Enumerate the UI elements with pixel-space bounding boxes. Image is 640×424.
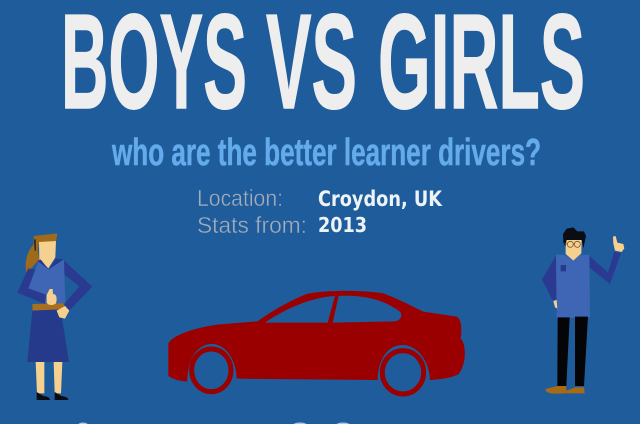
icon: red car — [168, 291, 465, 394]
location and date details — [197, 185, 443, 238]
car body — [168, 291, 465, 382]
icon: man giving thumbs up — [542, 227, 624, 394]
value: location: Croydon, UK — [318, 187, 443, 211]
car windows — [265, 296, 401, 323]
label: stats from: Stats from: — [197, 212, 307, 238]
label: location: Location: — [197, 185, 283, 211]
icon: woman giving thumbs up — [17, 233, 92, 400]
cropped shapes along bottom edge — [78, 422, 350, 424]
rear wheel — [382, 351, 424, 394]
value: year: 2013 — [318, 213, 367, 237]
front wheel — [192, 349, 231, 392]
